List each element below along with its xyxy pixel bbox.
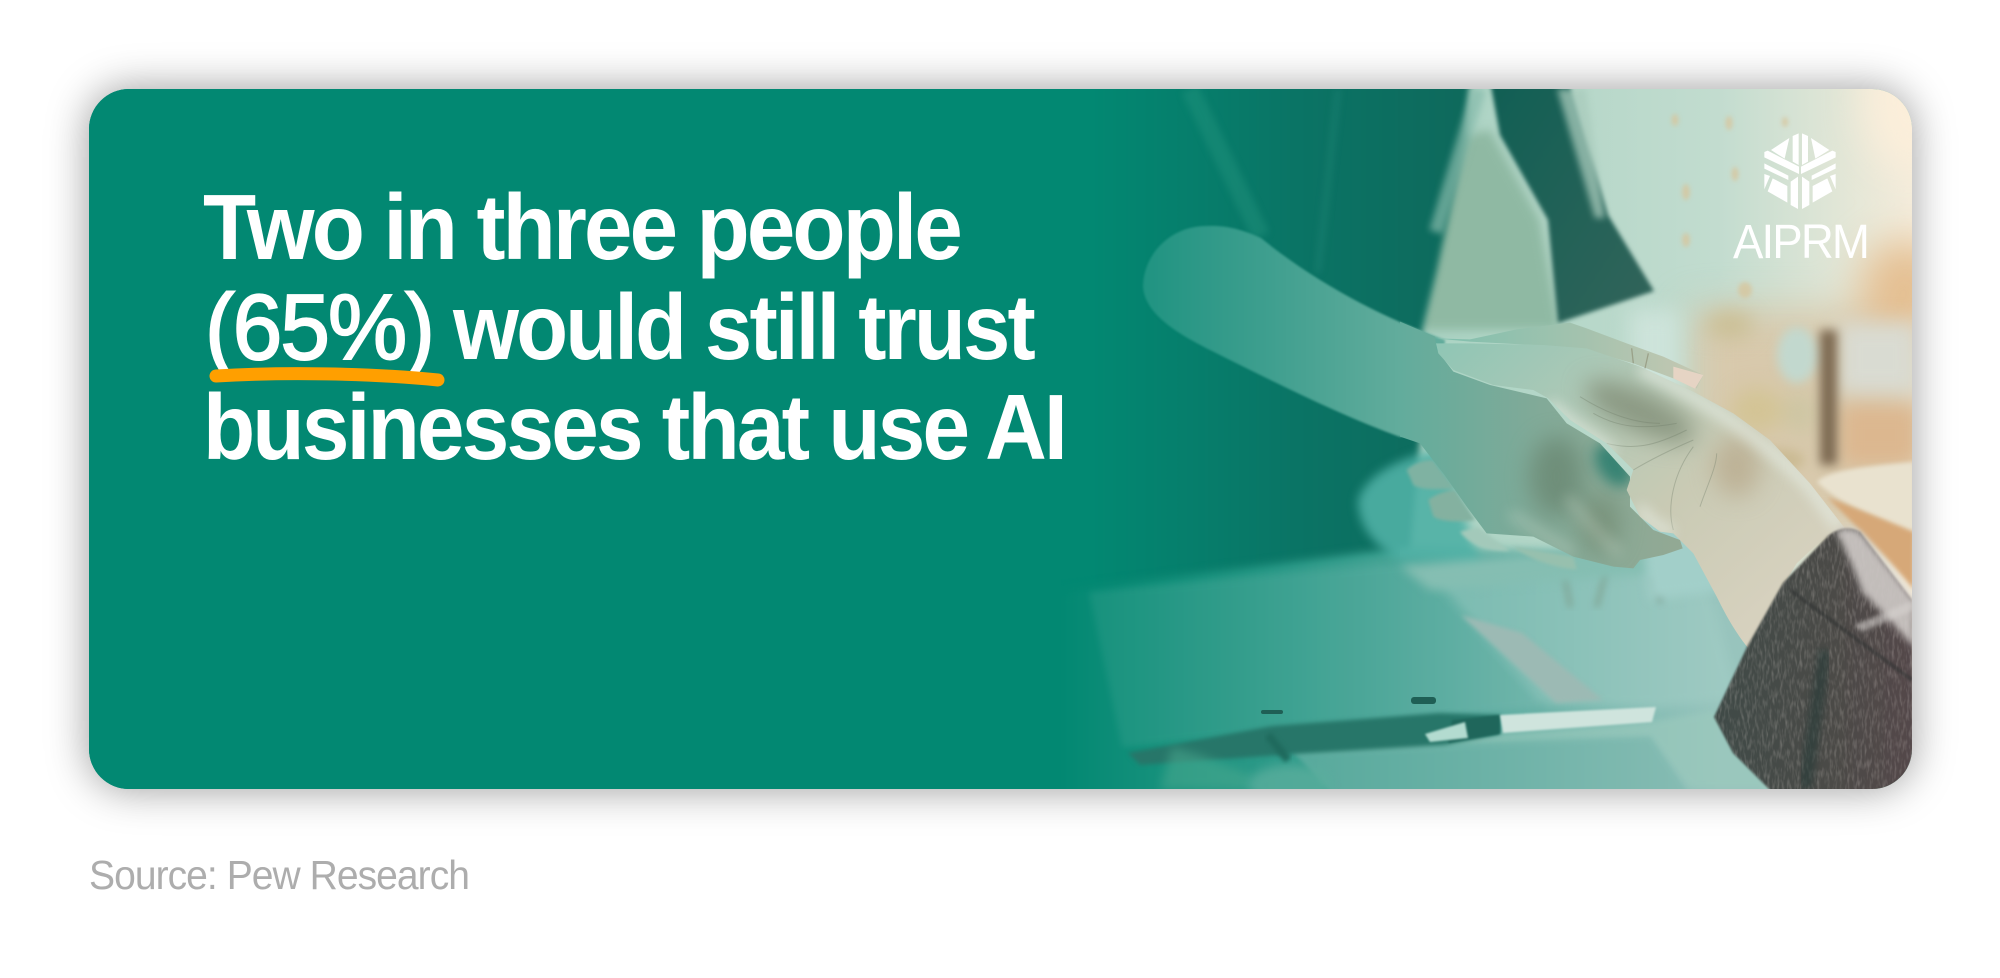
desk: white pen [1500, 707, 1656, 733]
photo: left person's forearm [1143, 226, 1445, 437]
underline highlight under 65% [216, 374, 438, 380]
heading line 1: Two in three people [203, 175, 960, 279]
photo: right person's fingertip [1435, 323, 1703, 389]
desk: pale band below pen [1300, 720, 1688, 772]
desk: paper at the bottom [1296, 746, 1678, 789]
desk: blurred cup at the bottom [1160, 747, 1250, 790]
panel: teal card background [89, 89, 1912, 789]
photo: knitted sweater cuff [1714, 528, 1914, 792]
logo: AIPRM [1733, 133, 1868, 269]
desk: small clips [1411, 697, 1436, 704]
photo: right person's hand and forearm [1436, 343, 1845, 648]
icon: AIPRM hexagon mark [1764, 133, 1836, 209]
source note: Source: Pew Research [89, 852, 469, 898]
photo: left person's hand [1400, 322, 1683, 568]
desk: grey wedge [1461, 615, 1603, 703]
photo: blurred backdrop behind lower fingers [1358, 450, 1730, 600]
heading [203, 175, 1065, 479]
desk: tablet shape [1089, 563, 1542, 747]
photo background: bright blurred room [1411, 89, 1912, 789]
photo: left person's hidden fingers [1407, 460, 1577, 569]
photo: desk surface [1088, 544, 1770, 789]
desk: dark bar [1128, 713, 1500, 765]
logo wordmark: AIPRM [1733, 216, 1868, 269]
heading line 2: highlighted figure: (65%) [205, 275, 433, 379]
photo: dark shirt sleeve [1488, 70, 1654, 323]
photo: wooden desk at the right edge [1817, 462, 1914, 590]
desk: lighter surface behind tablet [1442, 574, 1702, 708]
photo: sleeve strap highlight [1557, 89, 1605, 218]
photo: handshake over a desk, tinted teal [89, 89, 1912, 789]
heading line 3: businesses that use AI [203, 375, 1065, 479]
photo: shirt collar and fold highlights [1186, 89, 1486, 236]
overlay: solid teal left portion [89, 89, 128, 789]
heading line 2: remaining text: would still trust [452, 275, 1035, 379]
desk: blurred reflections under the hands [1565, 575, 1660, 605]
photo: gap between shirt and sleeve [1420, 130, 1560, 330]
photo: dark shirt of the left person [1177, 89, 1474, 571]
